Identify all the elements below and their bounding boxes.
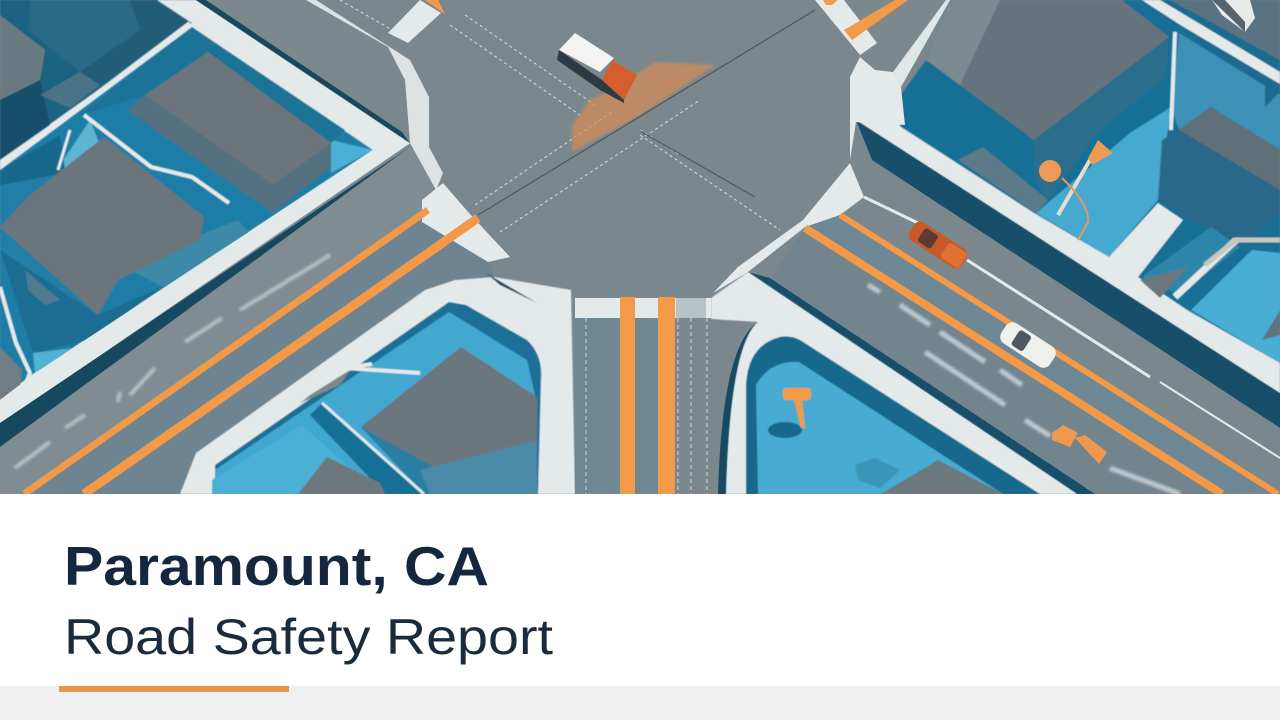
bottom right lot (711, 272, 1077, 494)
road marking smudges (868, 285, 1180, 494)
dark curb shadows (0, 0, 410, 447)
icon: orange sign (768, 388, 811, 438)
icon: orange pole markers (1039, 140, 1113, 240)
white car (1000, 322, 1056, 368)
dashed crossing lines (340, 0, 780, 232)
north crosswalks (306, 0, 950, 190)
title: Paramount, CA (64, 535, 489, 597)
south-east road (713, 120, 1280, 494)
orange car (908, 222, 968, 268)
subtitle: Road Safety Report (64, 609, 553, 665)
orange lane lines south-east (805, 215, 1278, 494)
bottom centre lot (180, 273, 575, 494)
white lane line (864, 197, 1280, 458)
skid debris trail (572, 62, 715, 152)
orange cones (1052, 425, 1107, 464)
orange accent rule (59, 686, 289, 692)
road marking smudges (15, 255, 330, 468)
north-east grey road (815, 0, 950, 87)
north-west road surface (206, 0, 410, 143)
south road (575, 297, 758, 494)
south-west corner island (422, 183, 510, 262)
orange lane lines south-west (24, 210, 478, 494)
footer strip (0, 686, 1280, 720)
top-left city block (0, 0, 410, 423)
title panel (0, 494, 1280, 720)
aerial intersection illustration (0, 0, 1280, 494)
south-east corner island (713, 163, 864, 293)
top-right city block (856, 0, 1280, 393)
white curb corner (0, 143, 410, 423)
white truck top right (1212, 0, 1255, 32)
orange vertical lane lines (620, 297, 675, 494)
truck (557, 33, 637, 103)
south-west road (0, 147, 494, 494)
central intersection (306, 0, 856, 298)
dark crossing lines (478, 10, 815, 215)
